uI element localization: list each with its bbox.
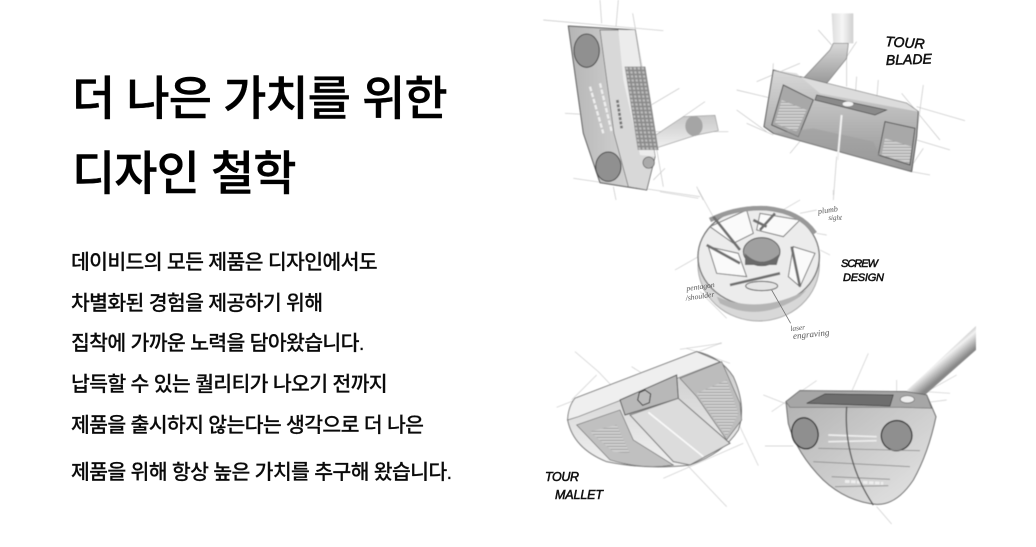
label: tour mallet xyxy=(545,470,604,502)
handwritten notes: laser xyxy=(790,322,806,333)
head xyxy=(764,70,918,172)
blade body xyxy=(568,26,655,190)
sketch: tour mallet xyxy=(557,343,758,507)
handwritten notes: /shoulder xyxy=(684,290,715,303)
title: 더 나은 가치를 위한 xyxy=(72,72,447,125)
sketch: tour blade face putter xyxy=(543,0,728,200)
handwritten notes: plumb xyxy=(816,204,838,216)
sketch: screw design xyxy=(660,190,843,349)
label: screw design: SCREW xyxy=(841,258,880,270)
shaft xyxy=(832,13,853,43)
body text: 데이비드의 모든 제품은 디자인에서도 xyxy=(71,251,377,274)
body text: 차별화된 경험을 제공하기 위해 xyxy=(71,292,322,315)
handwritten notes: sight xyxy=(828,214,843,222)
body text: 제품을 출시하지 않는다는 생각으로 더 나은 xyxy=(71,414,423,437)
label: tour blade xyxy=(885,33,933,68)
sketch: mallet face putter xyxy=(763,326,976,524)
handwritten notes: engraving xyxy=(792,327,830,341)
shaft xyxy=(907,326,976,395)
label: screw design: DESIGN xyxy=(843,272,884,284)
title xyxy=(72,72,447,200)
sketch: tour blade back putter xyxy=(737,13,965,200)
hosel xyxy=(653,115,718,148)
label: tour mallet: TOUR xyxy=(545,470,579,484)
body text: 제품을 위해 항상 높은 가치를 추구해 왔습니다. xyxy=(71,461,452,484)
handwritten notes: pentagon xyxy=(685,280,715,293)
label: screw design xyxy=(841,258,884,284)
body text: 납득할 수 있는 퀄리티가 나오기 전까지 xyxy=(71,373,387,396)
label: tour blade: TOUR xyxy=(885,33,925,52)
body text xyxy=(71,251,452,484)
handwritten notes xyxy=(684,204,843,341)
title: 디자인 철학 xyxy=(72,147,296,200)
label: tour blade: BLADE xyxy=(886,50,933,68)
head xyxy=(786,391,936,504)
label: tour mallet: MALLET xyxy=(555,488,604,502)
body text: 집착에 가까운 노력을 담아왔습니다. xyxy=(71,332,364,355)
